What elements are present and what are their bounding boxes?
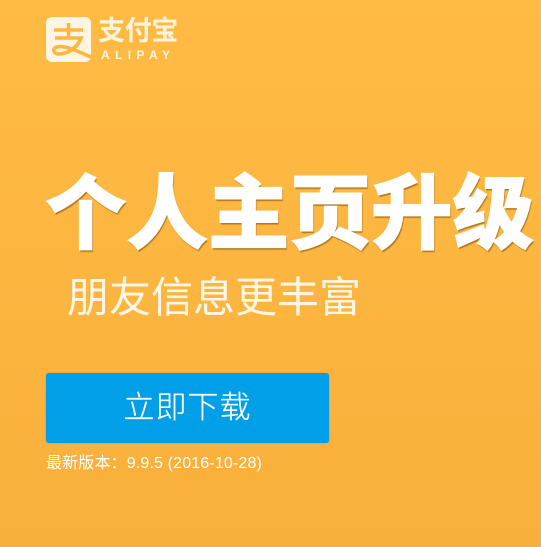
logo wordmark chinese: 支付宝 — [98, 16, 178, 46]
download button: 立即下载 — [124, 390, 252, 425]
logo wordmark latin: ALIPAY — [101, 48, 175, 62]
icon: Alipay mark — [46, 17, 91, 62]
title: 个人主页升级 — [45, 169, 534, 260]
download button — [46, 373, 329, 443]
version text: 最新版本：9.9.5 (2016-10-28) — [46, 455, 262, 472]
logo: Alipay — [46, 16, 178, 62]
subtitle: 朋友信息更丰富 — [67, 274, 361, 321]
